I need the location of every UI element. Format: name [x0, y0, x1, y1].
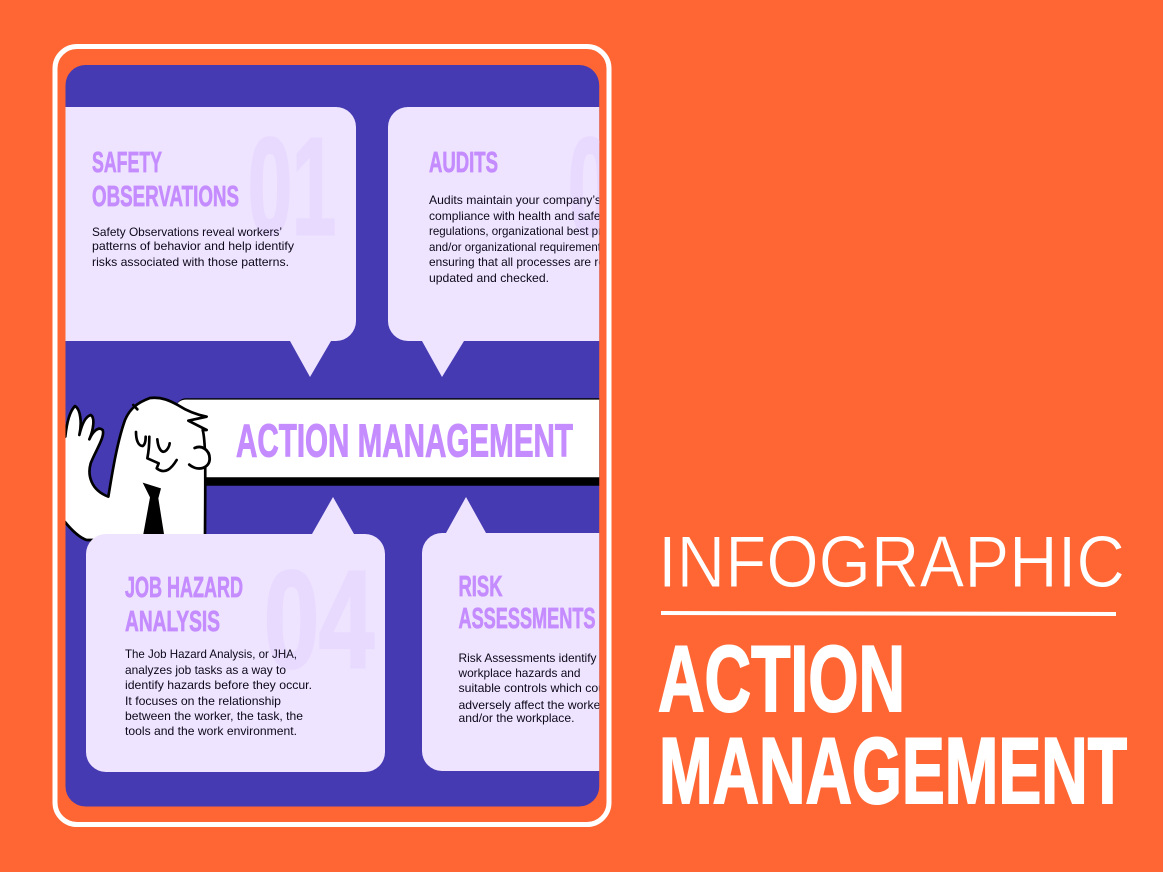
heading: ASSESSMENTS [458, 603, 596, 635]
card: risk assessments [422, 497, 600, 771]
icon: waving man with tie [63, 398, 210, 540]
card: safety observations [40, 107, 356, 377]
body text: patterns of behavior and help identify [92, 240, 294, 253]
card: job hazard analysis [86, 497, 385, 772]
title block [658, 522, 1127, 823]
necktie [143, 483, 164, 534]
body text: Audits maintain your company’s [429, 194, 601, 207]
body text: suitable controls which could [458, 682, 614, 695]
body text: regulations, organizational best practices, [429, 225, 641, 238]
body text: It focuses on the relationship [125, 695, 281, 708]
body text: workplace hazards and [457, 667, 580, 680]
body text: identify hazards before they occur. [125, 679, 312, 692]
heading [458, 575, 595, 629]
heading: AUDITS [429, 147, 498, 179]
body text [429, 196, 600, 284]
panel background [66, 65, 600, 806]
white rounded frame [55, 46, 609, 824]
body text [92, 226, 294, 269]
heading [92, 151, 238, 207]
body text: ensuring that all processes are regularly [429, 256, 640, 269]
body text: risks associated with those patterns. [92, 256, 289, 269]
heading: RISK [458, 571, 503, 603]
body text: analyzes job tasks as a way to [125, 664, 286, 677]
body text: The Job Hazard Analysis, or JHA, [125, 648, 297, 661]
body text: tools and the work environment. [125, 725, 297, 738]
number 01: 01 [248, 110, 336, 264]
number 02: 02 [568, 110, 656, 264]
heading: JOB HAZARD [125, 572, 243, 604]
panel: infographic page [66, 65, 600, 806]
face [133, 405, 177, 471]
body text: Risk Assessments identify [458, 652, 597, 665]
body text: Safety Observations reveal workers’ [92, 226, 282, 239]
man body [63, 398, 207, 540]
heading [125, 576, 242, 632]
ear [189, 447, 210, 468]
body text [458, 654, 600, 724]
body text: and/or organizational requirements by [429, 241, 622, 254]
banner title: ACTION MANAGEMENT [236, 414, 573, 466]
body text: updated and checked. [429, 272, 549, 285]
title: action: ACTION [658, 626, 905, 731]
number 04: 04 [264, 543, 374, 697]
card: audits [388, 107, 600, 377]
body text [125, 648, 312, 738]
body text: between the worker, the task, the [125, 710, 303, 723]
heading: OBSERVATIONS [92, 181, 239, 213]
banner: action management [176, 398, 610, 486]
heading: SAFETY [92, 147, 162, 179]
heading: ANALYSIS [125, 606, 220, 638]
body text: adversely affect the worker [458, 699, 605, 712]
body text: compliance with health and safety [429, 210, 610, 223]
title: infographic: INFOGRAPHIC [658, 522, 1125, 603]
body text: and/or the workplace. [458, 712, 574, 725]
divider line [661, 611, 1116, 616]
